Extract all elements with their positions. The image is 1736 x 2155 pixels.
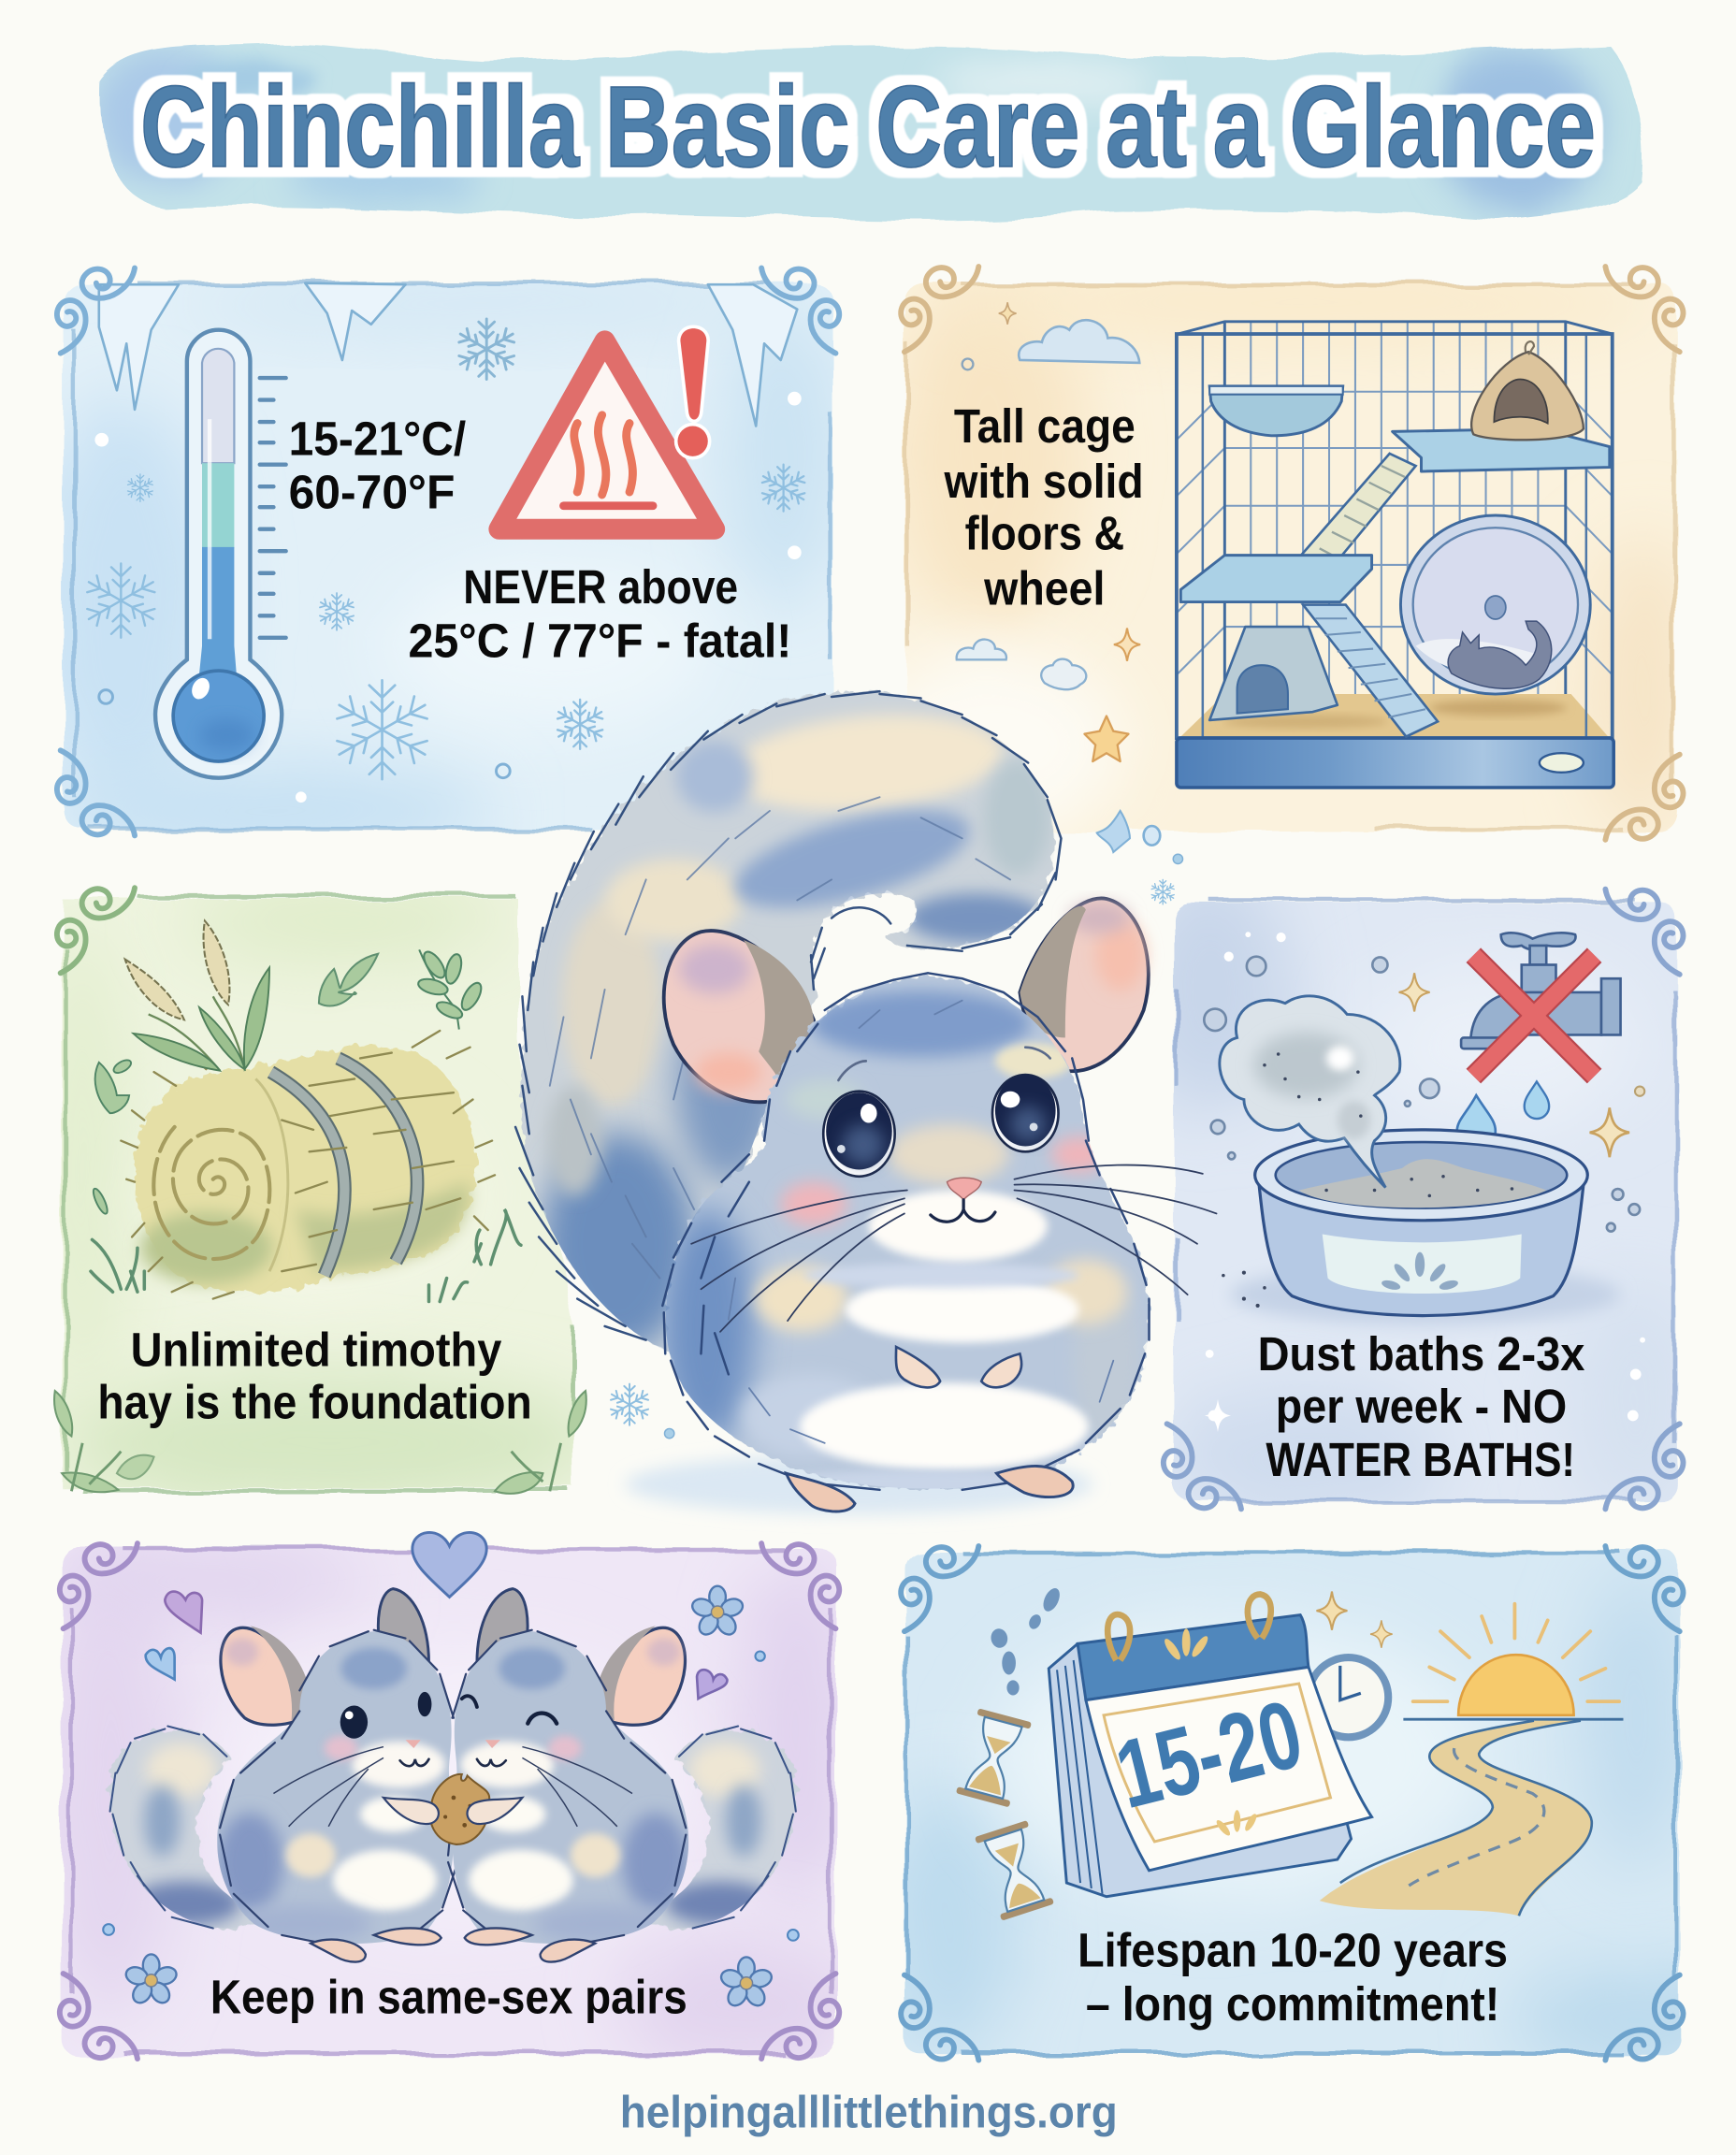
mini chinchilla in wheel bbox=[1448, 621, 1552, 688]
panel text bbox=[97, 1323, 532, 1428]
icon: heat warning triangle bbox=[499, 328, 715, 529]
tail interior wisps bbox=[550, 797, 1010, 1279]
corner ornaments bbox=[57, 268, 839, 835]
icons: small hearts bbox=[146, 1592, 727, 1699]
panel: pairs bbox=[41, 1532, 866, 2075]
icon: grass and wheat bbox=[91, 920, 521, 1302]
panel: temperature bbox=[27, 268, 846, 858]
tail edge fur bbox=[515, 691, 1061, 1340]
icons: hourglasses bbox=[956, 1708, 1054, 1921]
icons: footprints bbox=[990, 1585, 1063, 1695]
icons: flowers bbox=[103, 1586, 799, 2009]
warning text: 25°C / 77°F - fatal! bbox=[408, 613, 791, 667]
panel text bbox=[1078, 1923, 1508, 2031]
hideout bbox=[1209, 627, 1338, 720]
warning text: NEVER above bbox=[463, 559, 738, 614]
title banner watercolor wash bbox=[99, 43, 1642, 223]
panel text: Tall cage bbox=[954, 398, 1136, 453]
food bowl bbox=[1209, 386, 1343, 436]
icon: big heart bbox=[412, 1532, 486, 1597]
panel text: with solid bbox=[944, 454, 1144, 508]
panel: dust baths bbox=[1127, 866, 1704, 1526]
exercise wheel bbox=[1400, 515, 1590, 694]
panel text: wheel bbox=[983, 561, 1105, 615]
icon: crossed out faucet bbox=[1457, 933, 1621, 1150]
temperature range text: 15-21°C/ bbox=[289, 411, 466, 465]
panel: lifespan bbox=[879, 1540, 1736, 2075]
body fur bbox=[662, 973, 1150, 1490]
nose and mouth bbox=[931, 1178, 995, 1222]
panel text: hay is the foundation bbox=[97, 1374, 532, 1428]
panel text: floors & bbox=[965, 506, 1124, 560]
panel text: Keep in same-sex pairs bbox=[210, 1970, 687, 2024]
road dashes bbox=[1409, 1748, 1544, 1886]
lower ramp bbox=[1303, 605, 1438, 737]
corner ornaments bbox=[60, 1543, 839, 2059]
tail bbox=[515, 691, 1061, 1353]
icon: clock bbox=[1309, 1657, 1388, 1737]
upper shelf bbox=[1393, 428, 1610, 471]
upper ramp bbox=[1297, 454, 1416, 576]
shadow bbox=[626, 1454, 1092, 1514]
calendar number: 15-20 bbox=[1107, 1679, 1312, 1829]
eyes bbox=[823, 1048, 1059, 1177]
clouds and stars bbox=[901, 267, 1684, 840]
icicles bbox=[99, 283, 797, 427]
illustration: central chinchilla bbox=[515, 691, 1217, 1514]
snowflakes bbox=[84, 319, 807, 779]
corner ornaments bbox=[901, 1546, 1684, 2061]
paws bbox=[896, 1347, 1021, 1387]
sparkles and bubbles bbox=[1164, 889, 1684, 1509]
hammock hut bbox=[1471, 341, 1584, 440]
body and head bbox=[661, 973, 1150, 1498]
panel text: WATER BATHS! bbox=[1266, 1432, 1575, 1486]
icons: sparkles bbox=[1317, 1592, 1393, 1648]
icon: dust bath bowl bbox=[1222, 1130, 1621, 1324]
icon: cookie bbox=[383, 1774, 522, 1844]
illustration: right chinchilla bbox=[439, 1589, 797, 1962]
left ear bbox=[664, 931, 814, 1102]
panel text: per week - NO bbox=[1276, 1379, 1567, 1433]
panel text: Dust baths 2-3x bbox=[1258, 1326, 1585, 1381]
panel text bbox=[944, 398, 1144, 615]
dots bbox=[94, 392, 802, 803]
illustration: left chinchilla bbox=[108, 1589, 468, 1962]
temperature range text: 60-70°F bbox=[289, 465, 455, 519]
icon: sun bbox=[1403, 1604, 1623, 1719]
panel text: – long commitment! bbox=[1086, 1976, 1499, 2031]
road edges bbox=[1340, 1721, 1592, 1916]
corner leaves bbox=[54, 888, 586, 1494]
icon: thermometer bbox=[155, 330, 286, 778]
icon: road bbox=[1320, 1719, 1592, 1916]
warning text bbox=[408, 559, 791, 667]
middle shelf bbox=[1180, 556, 1372, 602]
temperature range text bbox=[289, 411, 466, 519]
cage base bbox=[1177, 738, 1613, 788]
icon: hay bale bbox=[121, 1031, 495, 1299]
footer url: helpingalllittlethings.org bbox=[620, 2088, 1118, 2138]
panel text: Unlimited timothy bbox=[131, 1323, 502, 1377]
icon: calendar bbox=[1049, 1594, 1372, 1897]
icon: cage bbox=[1177, 322, 1613, 788]
decorative flakes near main figure bbox=[609, 811, 1183, 1439]
panel text: Lifespan 10-20 years bbox=[1078, 1923, 1508, 1977]
right ear bbox=[1020, 898, 1149, 1071]
icon: dust cloud bbox=[1220, 996, 1400, 1188]
panel: hay bbox=[41, 879, 605, 1511]
panel text bbox=[1258, 1326, 1585, 1486]
feet bbox=[787, 1466, 1073, 1511]
whiskers bbox=[691, 1165, 1217, 1332]
